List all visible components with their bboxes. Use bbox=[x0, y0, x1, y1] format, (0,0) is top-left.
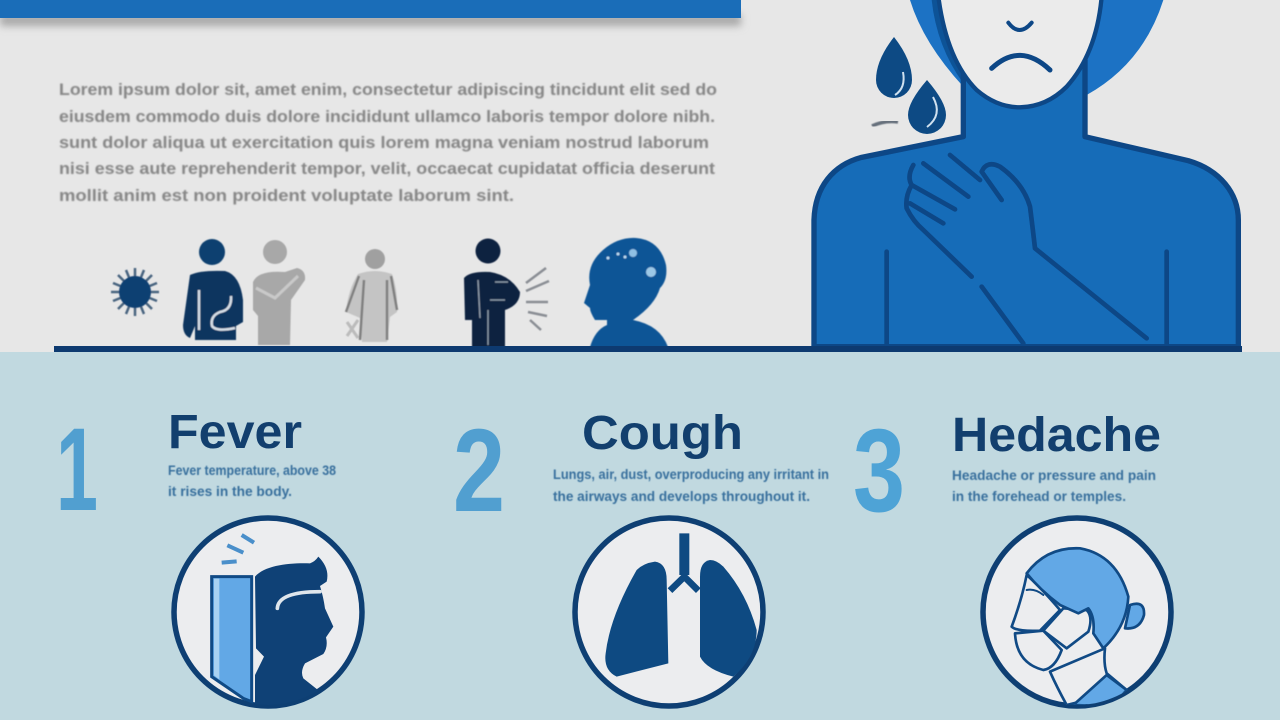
icon: head and thermometer bbox=[174, 518, 362, 713]
cough description: Lungs, air, dust, overproducing any irritant in bbox=[553, 466, 829, 482]
illustration: sick person holding throat bbox=[814, 0, 1238, 347]
intro text block: nisi esse aute reprehenderit tempor, velit, occaecat cupidatat officia deserunt bbox=[59, 159, 715, 178]
fever description: it rises in the body. bbox=[168, 483, 292, 499]
drop 1 bbox=[876, 37, 912, 98]
panel: cough bbox=[453, 405, 829, 706]
fever description bbox=[168, 462, 336, 499]
cough description: the airways and develops throughout it. bbox=[553, 488, 810, 504]
top background panel bbox=[0, 0, 1280, 352]
intro text block: sunt dolor aliqua ut exercitation quis lorem magna veniam nostrud laborum bbox=[59, 133, 709, 152]
frown bbox=[992, 55, 1050, 70]
number 2: 2 bbox=[453, 405, 505, 537]
face bbox=[938, 0, 1102, 107]
icon: sweat drops bbox=[872, 37, 946, 134]
lower panel background bbox=[0, 352, 1280, 720]
icon row: symptom figures bbox=[111, 238, 668, 347]
icon: masked head bbox=[983, 518, 1171, 706]
body bbox=[814, 60, 1238, 347]
hair bbox=[910, 0, 1163, 95]
baseline divider bbox=[54, 346, 1242, 352]
icon: grey person bbox=[253, 240, 305, 345]
icon: person holding stomach bbox=[183, 239, 243, 340]
heading: headache: Hedache bbox=[952, 409, 1161, 462]
intro text block bbox=[59, 80, 717, 205]
heading: cough: Cough bbox=[582, 407, 743, 460]
icon: grey robed figure bbox=[346, 249, 397, 342]
heading: fever: Fever bbox=[168, 406, 302, 459]
cough description bbox=[553, 466, 829, 504]
nose bbox=[1008, 23, 1032, 30]
intro text block: mollit anim est non proident voluptate laborum sint. bbox=[59, 186, 514, 205]
icon: virus bbox=[111, 268, 159, 316]
headache description bbox=[952, 467, 1156, 504]
intro text block: Lorem ipsum dolor sit, amet enim, consectetur adipiscing tincidunt elit sed do bbox=[59, 80, 717, 99]
headache description: in the forehead or temples. bbox=[952, 488, 1126, 504]
number 3: 3 bbox=[853, 405, 905, 537]
intro text block: eiusdem commodo duis dolore incididunt ullamco laboris tempor dolore nibh. bbox=[59, 107, 715, 126]
icon: coughing person bbox=[464, 238, 549, 347]
drop 2 bbox=[908, 80, 946, 134]
headache description: Headache or pressure and pain bbox=[952, 467, 1156, 483]
header bar bbox=[0, 0, 741, 26]
fever description: Fever temperature, above 38 bbox=[168, 462, 336, 478]
hand and arm bbox=[887, 155, 1167, 347]
icon: head with headache dots bbox=[584, 238, 668, 347]
panel: headache bbox=[853, 405, 1171, 706]
number 1: 1 bbox=[56, 404, 98, 536]
icon: lungs bbox=[575, 518, 763, 706]
smudge bbox=[872, 122, 898, 126]
panel: fever bbox=[56, 404, 362, 713]
